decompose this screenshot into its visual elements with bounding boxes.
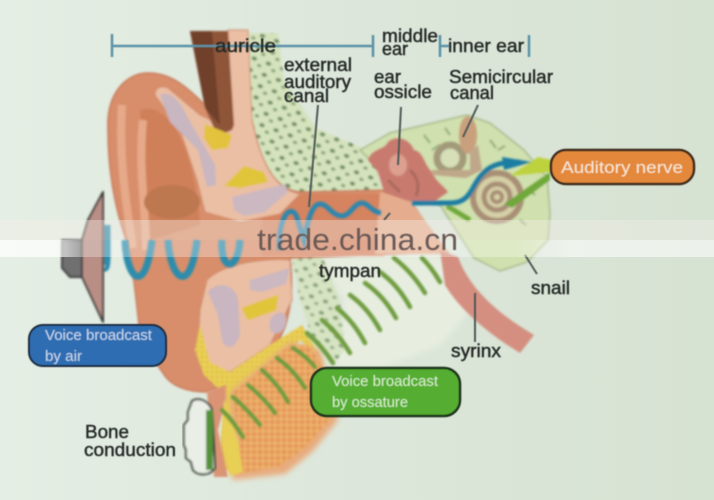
upper temporal bone, green dotted	[248, 33, 385, 195]
outer sound waves	[104, 225, 240, 276]
inner ear bone, green	[360, 115, 550, 271]
inner ear bone speckles	[424, 128, 535, 225]
outer ear body	[108, 73, 445, 392]
label: middle ear: middle	[382, 26, 438, 46]
label: ear ossicle	[374, 67, 432, 102]
leader lines	[309, 105, 537, 342]
blue nerve line	[412, 162, 520, 203]
yellow strip lower	[222, 400, 243, 476]
concha area	[140, 109, 200, 240]
lower yellow fat	[242, 295, 278, 320]
syrinx tube	[440, 250, 534, 353]
labels	[84, 26, 570, 460]
label: bone conduction	[84, 422, 176, 460]
ear fold highlights	[121, 105, 146, 250]
lower cartilage cream	[198, 260, 292, 372]
speaker icon	[62, 192, 103, 322]
label: tympan: tympan	[319, 261, 381, 281]
label: middle ear	[382, 26, 438, 59]
callout: voice broadcast by air: Voice broadcast	[45, 327, 153, 344]
label: external auditory canal: auditory	[284, 72, 351, 92]
callout: voice broadcast by air: by air	[45, 348, 82, 365]
callout: auditory nerve: Auditory nerve	[561, 158, 683, 177]
yellow fat middle	[224, 166, 268, 188]
soft area behind the lower bone	[318, 256, 470, 368]
small cartilage	[266, 310, 290, 336]
label: external auditory canal: external	[284, 55, 352, 75]
callout: voice broadcast by ossature: by ossature	[332, 394, 408, 411]
skin strip near jaw	[207, 385, 228, 477]
ossicles	[368, 138, 448, 206]
callout: auditory nerve	[551, 150, 694, 184]
label: syrinx: syrinx	[451, 341, 501, 361]
label: external auditory canal: canal	[284, 86, 329, 106]
label: bone conduction: conduction	[84, 440, 176, 460]
callout: voice broadcast by air	[29, 325, 166, 366]
label: snail: snail	[531, 278, 570, 298]
label: ear ossicle: ossicle	[374, 82, 432, 102]
label: middle ear: ear	[382, 39, 408, 59]
label: ear ossicle: ear	[374, 67, 401, 87]
label: semicircular canal: Semicircular	[449, 67, 553, 87]
tissue fade halo	[230, 342, 338, 480]
canal sound wave	[279, 203, 381, 250]
bone conduction green bars	[222, 258, 440, 437]
tissue, orange dotted	[232, 345, 330, 474]
scale bar: auricle, middle ear, inner ear	[112, 34, 529, 57]
label: bone conduction: Bone	[85, 422, 129, 442]
ear anatomy illustration	[108, 30, 550, 472]
skin column	[155, 30, 300, 222]
label: semicircular canal: canal	[450, 83, 494, 103]
auditory nerve green	[504, 172, 550, 208]
label: inner ear: inner ear	[448, 36, 524, 56]
bone conductor icon	[184, 399, 215, 474]
yellow ring lower	[195, 325, 325, 472]
label: auricle: auricle	[215, 36, 276, 56]
watermark band	[0, 220, 714, 257]
brown pillar	[190, 31, 234, 133]
yellow fat top	[204, 124, 232, 150]
ear drum area	[375, 192, 450, 254]
callout: voice broadcast by ossature	[311, 368, 460, 416]
upper cartilage grey	[160, 94, 216, 187]
semicircular loop	[459, 116, 477, 154]
ear canal orange	[262, 194, 384, 256]
cartilage grey middle	[232, 184, 288, 216]
watermark text: trade.china.cn	[257, 222, 458, 257]
semicircular canal arc	[437, 145, 463, 171]
label: external auditory canal	[284, 55, 352, 106]
ear details over tissue	[104, 116, 552, 477]
concha shadow	[144, 185, 200, 219]
cochlea	[473, 173, 521, 221]
lower bone area	[292, 256, 345, 362]
callout: voice broadcast by ossature: Voice broadcast	[332, 373, 439, 390]
lower cartilage grey	[208, 285, 240, 347]
label: semicircular canal	[449, 67, 553, 103]
